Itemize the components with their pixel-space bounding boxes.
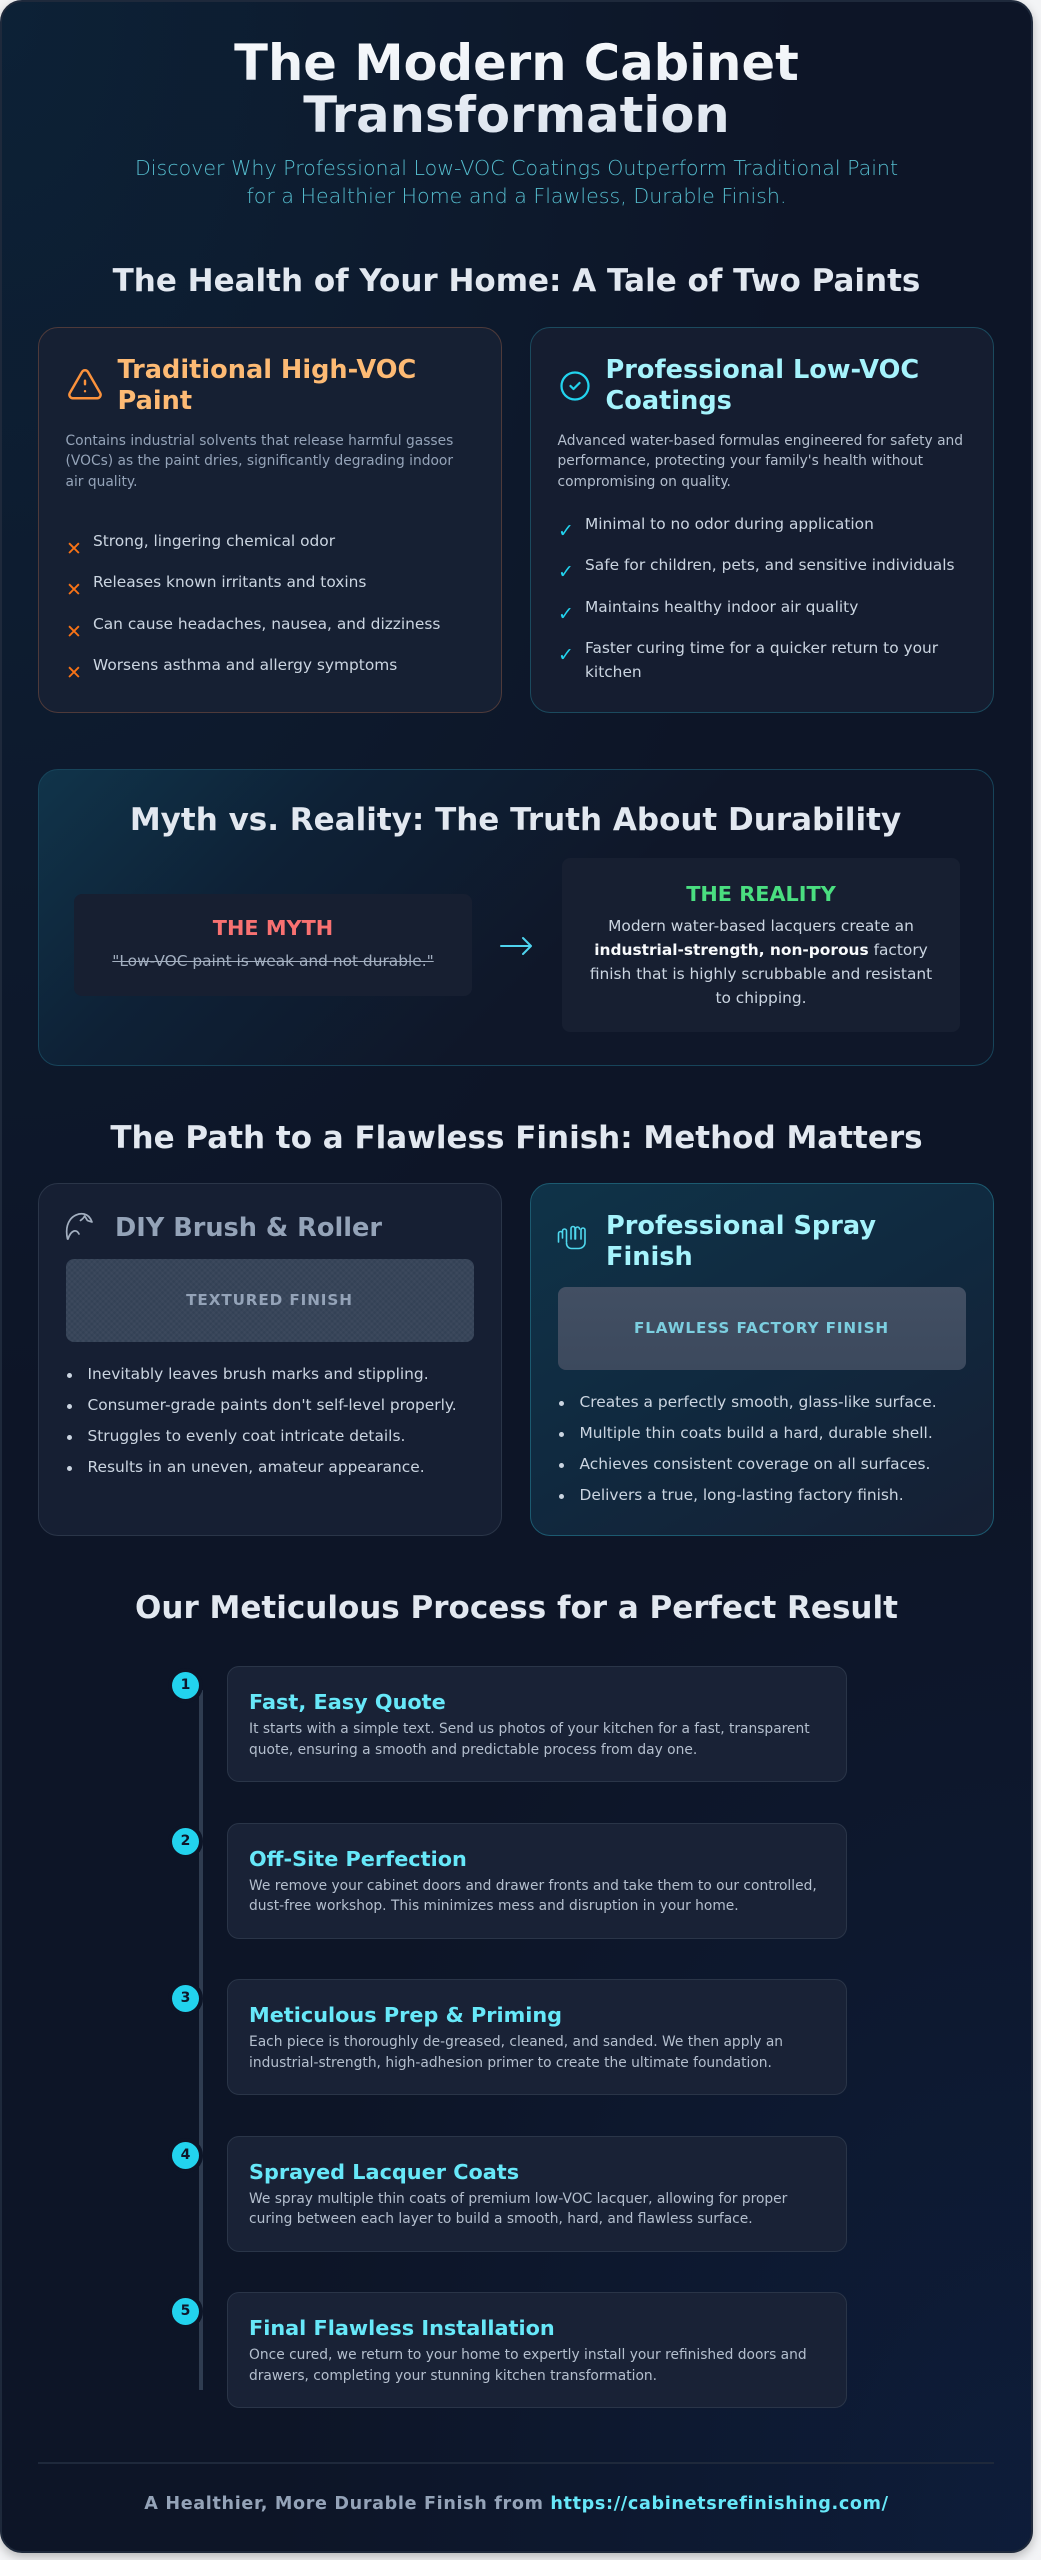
step 4 number bbox=[172, 2142, 199, 2168]
myth label: THE MYTH bbox=[213, 916, 333, 940]
step 1 number bbox=[172, 1672, 199, 1699]
reality text: to chipping. bbox=[715, 988, 807, 1006]
description: compromising on quality. bbox=[558, 474, 731, 490]
step 3 text bbox=[249, 2034, 783, 2071]
title: Transformation bbox=[303, 86, 730, 144]
heading: professional: Coatings bbox=[606, 386, 732, 416]
heading: path: The Path to a Flawless Finish: Method Matters bbox=[110, 1120, 923, 1156]
item: Results in an uneven, amateur appearance. bbox=[88, 1458, 425, 1476]
item: Releases known irritants and toxins bbox=[93, 573, 366, 591]
textured finish swatch: TEXTURED FINISH bbox=[186, 1290, 353, 1308]
step 4 number: 4 bbox=[181, 2146, 190, 2162]
bullet bbox=[67, 1466, 72, 1471]
panel: diy bbox=[38, 1183, 502, 1536]
heading: spray bbox=[606, 1211, 876, 1272]
icon: warning triangle bbox=[68, 369, 102, 400]
step 3 title: Meticulous Prep & Priming bbox=[249, 2003, 562, 2027]
reality text: Modern water-based lacquers create an bbox=[608, 916, 914, 934]
step 3 number: 3 bbox=[181, 1990, 190, 2006]
subtitle: Discover Why Professional Low-VOC Coatings Outperform Traditional Paint bbox=[135, 156, 898, 180]
panel: myth vs reality bbox=[38, 769, 994, 1066]
item: Multiple thin coats build a hard, durable shell. bbox=[580, 1424, 933, 1442]
arrow bbox=[500, 937, 532, 955]
heading: myth vs reality: Myth vs. Reality: The Truth About Durability bbox=[130, 802, 901, 838]
bullet bbox=[559, 1432, 564, 1437]
panel: traditional paint bbox=[38, 327, 502, 713]
step 3 number bbox=[172, 1985, 199, 2012]
marker: ✓ bbox=[558, 644, 574, 666]
step 2 text: We remove your cabinet doors and drawer fronts and take them to our controlled, bbox=[249, 1878, 817, 1894]
description: performance, protecting your family's health without bbox=[558, 453, 923, 469]
description bbox=[558, 432, 963, 490]
step 4 text bbox=[249, 2190, 788, 2227]
step 5 text: drawers, completing your stunning kitchen transformation. bbox=[249, 2368, 657, 2384]
item: Struggles to evenly coat intricate details. bbox=[88, 1427, 405, 1445]
reality label: THE REALITY bbox=[686, 882, 836, 906]
step 4 title: Sprayed Lacquer Coats bbox=[249, 2160, 519, 2184]
description: air quality. bbox=[66, 474, 137, 490]
step 1 text: It starts with a simple text. Send us photos of your kitchen for a fast, transparent bbox=[249, 1721, 810, 1737]
step 1 title: Fast, Easy Quote bbox=[249, 1690, 446, 1714]
step 1 number: 1 bbox=[181, 1677, 190, 1693]
bullet bbox=[559, 1463, 564, 1468]
step 1 text: quote, ensuring a smooth and predictable process from day one. bbox=[249, 1742, 697, 1758]
step 5 number bbox=[172, 2298, 199, 2325]
timeline bbox=[172, 1666, 847, 2408]
step 5 text bbox=[249, 2347, 807, 2384]
reality box bbox=[562, 858, 960, 1032]
reality text: finish that is highly scrubbable and resistant bbox=[590, 964, 932, 982]
step 4 text: We spray multiple thin coats of premium low-VOC lacquer, allowing for proper bbox=[249, 2190, 787, 2206]
step 5 number: 5 bbox=[181, 2303, 190, 2319]
marker: ✓ bbox=[558, 561, 574, 583]
marker: ✓ bbox=[558, 602, 574, 624]
item: Inevitably leaves brush marks and stippling. bbox=[88, 1365, 429, 1383]
step 5 text: Once cured, we return to your home to expertly install your refinished doors and bbox=[249, 2347, 807, 2363]
heading: spray: Finish bbox=[606, 1242, 693, 1272]
heading: professional: Professional Low-VOC bbox=[606, 355, 919, 385]
icon: hand bbox=[558, 1226, 586, 1250]
step 5 title: Final Flawless Installation bbox=[249, 2316, 555, 2340]
heading: professional bbox=[606, 355, 919, 416]
item: Delivers a true, long-lasting factory finish. bbox=[580, 1486, 904, 1504]
step 2 number bbox=[172, 1828, 199, 1855]
item: Worsens asthma and allergy symptoms bbox=[93, 656, 397, 674]
title: The Modern Cabinet bbox=[234, 34, 799, 92]
heading: traditional: Paint bbox=[118, 386, 192, 416]
bullet bbox=[559, 1494, 564, 1499]
list: benefits bbox=[558, 515, 955, 681]
description bbox=[66, 432, 454, 490]
step 3 text: industrial-strength, high-adhesion primer to create the ultimate foundation. bbox=[249, 2055, 772, 2071]
step 5 card bbox=[227, 2292, 847, 2408]
item: Safe for children, pets, and sensitive individuals bbox=[585, 556, 955, 574]
reality text: industrial-strength, non-porous factory bbox=[594, 940, 928, 958]
step 3 card bbox=[227, 1979, 847, 2095]
list: drawbacks bbox=[66, 532, 440, 684]
item: Maintains healthy indoor air quality bbox=[585, 598, 858, 616]
marker: ✕ bbox=[66, 579, 82, 601]
panel: professional coatings bbox=[530, 327, 994, 713]
bullet bbox=[67, 1373, 72, 1378]
flawless finish swatch bbox=[558, 1286, 966, 1370]
item: Achieves consistent coverage on all surfaces. bbox=[580, 1455, 930, 1473]
heading: traditional: Traditional High-VOC bbox=[118, 355, 416, 385]
step 4 text: curing between each layer to build a smooth, hard, and flawless surface. bbox=[249, 2211, 753, 2227]
heading: traditional bbox=[118, 355, 416, 416]
step 2 card bbox=[227, 1822, 847, 1938]
marker: ✕ bbox=[66, 662, 82, 684]
flawless finish swatch: FLAWLESS FACTORY FINISH bbox=[634, 1318, 889, 1336]
myth box bbox=[74, 894, 472, 996]
heading: spray: Professional Spray bbox=[606, 1211, 876, 1241]
step 1 text bbox=[249, 1721, 810, 1758]
subtitle bbox=[135, 156, 898, 208]
icon: check circle bbox=[560, 371, 590, 401]
step 2 title: Off-Site Perfection bbox=[249, 1846, 467, 1870]
timeline line bbox=[199, 1690, 202, 2390]
description: Advanced water-based formulas engineered for safety and bbox=[558, 432, 963, 448]
bullet bbox=[67, 1435, 72, 1440]
icon: brush bbox=[66, 1212, 93, 1240]
item: Strong, lingering chemical odor bbox=[93, 532, 335, 550]
marker: ✓ bbox=[558, 520, 574, 542]
item: kitchen bbox=[585, 663, 642, 681]
step 4 card bbox=[227, 2136, 847, 2252]
item: Can cause headaches, nausea, and dizziness bbox=[93, 614, 440, 632]
item: Consumer-grade paints don't self-level properly. bbox=[88, 1396, 457, 1414]
item: Minimal to no odor during application bbox=[585, 515, 874, 533]
heading: diy: DIY Brush & Roller bbox=[115, 1213, 382, 1243]
heading: process: Our Meticulous Process for a Perfect Result bbox=[135, 1590, 898, 1626]
step 2 text: dust-free workshop. This minimizes mess and disruption in your home. bbox=[249, 1898, 739, 1914]
list: diy drawbacks bbox=[67, 1365, 457, 1476]
reality text bbox=[590, 916, 932, 1006]
step 2 number: 2 bbox=[181, 1833, 190, 1849]
bullet bbox=[67, 1404, 72, 1409]
footer: A Healthier, More Durable Finish from https://cabinetsrefinishing.com/ bbox=[144, 2494, 889, 2514]
step 1 card bbox=[227, 1666, 847, 1782]
item: Creates a perfectly smooth, glass-like surface. bbox=[580, 1393, 937, 1411]
subtitle: for a Healthier Home and a Flawless, Durable Finish. bbox=[246, 184, 787, 208]
myth quote: "Low-VOC paint is weak and not durable." bbox=[112, 952, 434, 970]
description: Contains industrial solvents that release harmful gasses bbox=[66, 432, 453, 448]
textured finish swatch bbox=[66, 1258, 474, 1342]
description: (VOCs) as the paint dries, significantly degrading indoor bbox=[66, 453, 453, 469]
marker: ✕ bbox=[66, 538, 82, 560]
item: Faster curing time for a quicker return to your bbox=[585, 639, 938, 657]
marker: ✕ bbox=[66, 620, 82, 642]
panel: professional spray bbox=[530, 1183, 994, 1536]
step 3 text: Each piece is thoroughly de-greased, cleaned, and sanded. We then apply an bbox=[249, 2034, 783, 2050]
list: spray benefits bbox=[559, 1393, 937, 1504]
heading: health: The Health of Your Home: A Tale of Two Paints bbox=[113, 263, 920, 299]
step 2 text bbox=[249, 1878, 817, 1914]
item bbox=[585, 639, 938, 681]
title bbox=[0, 36, 1033, 142]
bullet bbox=[559, 1401, 564, 1406]
